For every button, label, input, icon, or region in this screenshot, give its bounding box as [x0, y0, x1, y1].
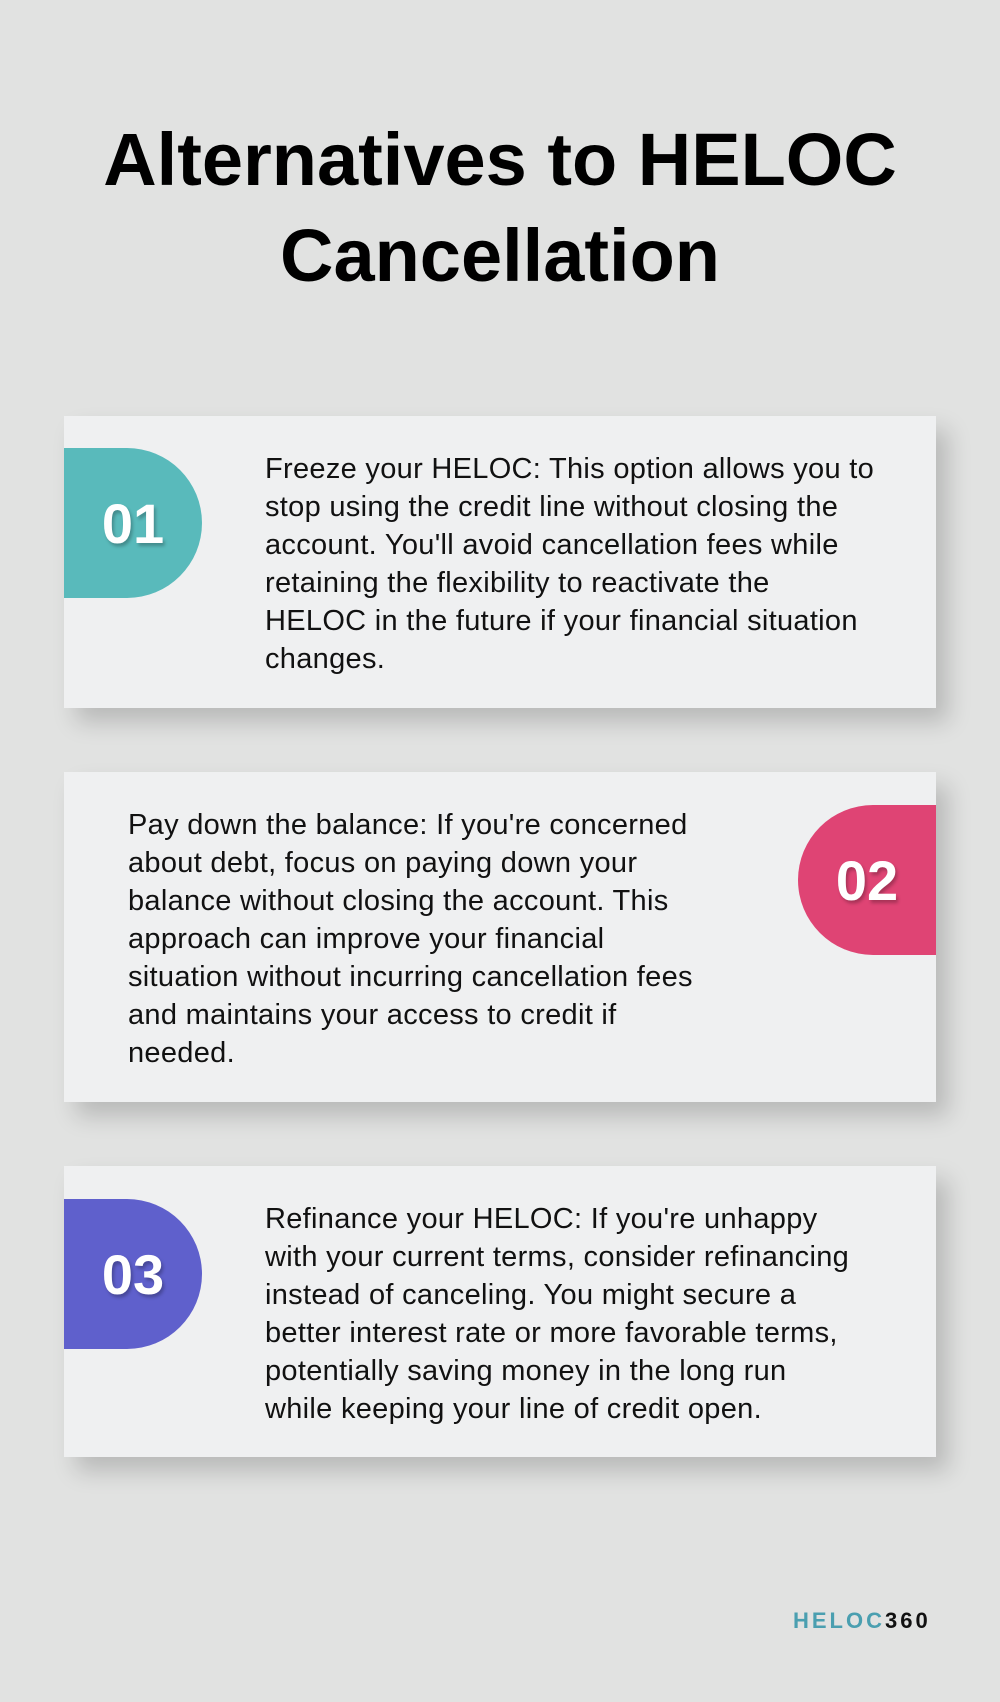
text 3: Refinance your HELOC: If you're unhappy [265, 1203, 817, 1235]
text 2: situation without incurring cancellation fees [128, 961, 693, 993]
text 1: account. You'll avoid cancellation fees while [265, 529, 839, 561]
logo: HELOC360 [793, 1608, 931, 1633]
text 2: and maintains your access to credit if [128, 999, 617, 1031]
panel: card 2 [64, 772, 936, 1102]
text 3: better interest rate or more favorable terms, [265, 1317, 838, 1349]
text 2: needed. [128, 1037, 235, 1069]
badge 01: 01 [102, 492, 164, 554]
text 2 [128, 809, 693, 1069]
text 3: while keeping your line of credit open. [265, 1393, 762, 1425]
text 3: potentially saving money in the long run [265, 1355, 786, 1387]
badge 03 [64, 1199, 202, 1349]
badge 01 [64, 448, 202, 598]
badge 03: 03 [102, 1242, 164, 1306]
title: Cancellation [280, 214, 720, 297]
badge 02 [798, 805, 936, 955]
text 2: balance without closing the account. This [128, 885, 669, 917]
text 3 [265, 1203, 849, 1425]
panel: card 3 [64, 1166, 936, 1457]
text 3: with your current terms, consider refinancing [265, 1241, 849, 1273]
title [103, 118, 897, 297]
text 1: stop using the credit line without closing the [265, 491, 838, 523]
text 1: changes. [265, 643, 385, 675]
text 2: about debt, focus on paying down your [128, 847, 637, 879]
text 1: Freeze your HELOC: This option allows you to [265, 453, 874, 485]
text 1 [265, 453, 874, 675]
text 2: approach can improve your financial [128, 923, 604, 955]
text 1: retaining the flexibility to reactivate the [265, 567, 770, 599]
badge 02: 02 [836, 848, 898, 912]
text 3: instead of canceling. You might secure a [265, 1279, 796, 1311]
title: Alternatives to HELOC [103, 118, 897, 201]
text 2: Pay down the balance: If you're concerned [128, 809, 688, 841]
panel: card 1 [64, 416, 936, 708]
text 1: HELOC in the future if your financial situation [265, 605, 858, 637]
